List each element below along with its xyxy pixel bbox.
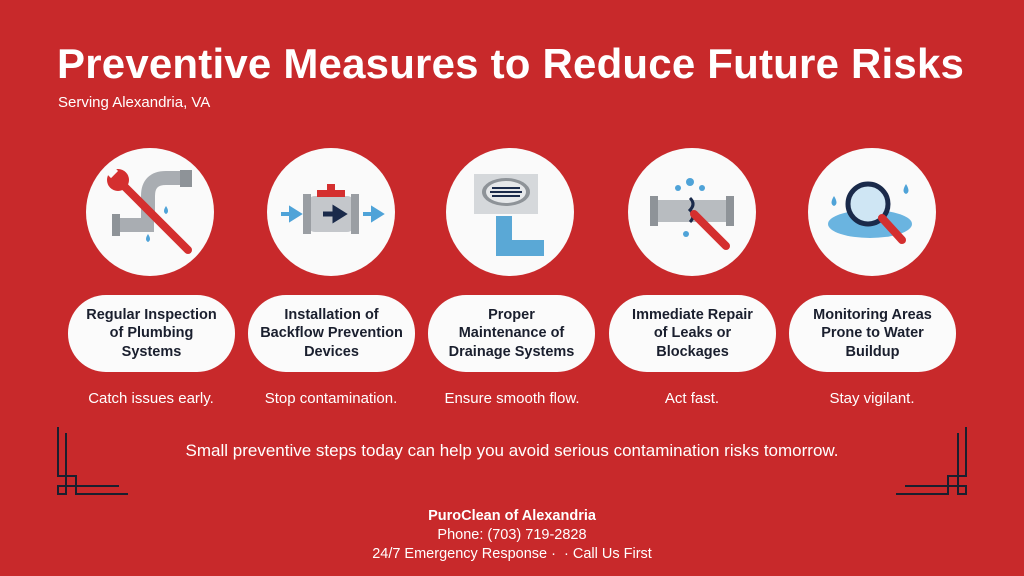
pill: step 2 xyxy=(248,295,415,372)
caption 3: Ensure smooth flow. xyxy=(444,390,580,407)
pill: step 5 xyxy=(789,295,956,372)
pill: step 5: Prone to Water xyxy=(821,325,924,341)
icon: drain xyxy=(446,148,574,276)
caption 5: Stay vigilant. xyxy=(829,390,915,407)
icon: magnifier over puddle xyxy=(808,148,936,276)
pill: step 1: Systems xyxy=(122,344,181,360)
pill: step 5: Buildup xyxy=(846,344,899,360)
pill: step 2: Installation of xyxy=(284,307,379,323)
pill: step 1: of Plumbing xyxy=(110,325,193,341)
pill: step 3 xyxy=(428,295,595,372)
pill: step 3: Drainage Systems xyxy=(449,344,574,360)
pill: step 1 xyxy=(68,295,235,372)
footer contact: 24/7 Emergency Response · · Call Us First xyxy=(372,546,652,562)
footer contact: PuroClean of Alexandria xyxy=(428,508,596,524)
caption 4: Act fast. xyxy=(665,390,719,407)
pill: step 3: Maintenance of xyxy=(459,325,564,341)
pill: step 2: Backflow Prevention xyxy=(260,325,403,341)
subtitle: Serving Alexandria, VA xyxy=(58,94,210,111)
pill: step 4: Immediate Repair xyxy=(632,307,753,323)
pill: step 4: Blockages xyxy=(656,344,729,360)
icon: leak repair xyxy=(628,148,756,276)
pill: step 3: Proper xyxy=(488,307,535,323)
icon: wrench and pipe xyxy=(86,148,214,276)
pill: step 1: Regular Inspection xyxy=(86,307,217,323)
footer contact: Phone: (703) 719-2828 xyxy=(437,527,587,543)
caption 2: Stop contamination. xyxy=(265,390,397,407)
pill: step 2: Devices xyxy=(304,344,359,360)
title: Preventive Measures to Reduce Future Risks xyxy=(57,40,964,87)
icon: backflow valve xyxy=(267,148,395,276)
pill: step 4 xyxy=(609,295,776,372)
pill: step 5: Monitoring Areas xyxy=(813,307,932,323)
pill: step 4: of Leaks or xyxy=(654,325,731,341)
message: Small preventive steps today can help you avoid serious contamination risks tomorrow. xyxy=(186,441,838,460)
caption 1: Catch issues early. xyxy=(88,390,214,407)
footer contact xyxy=(372,508,652,562)
